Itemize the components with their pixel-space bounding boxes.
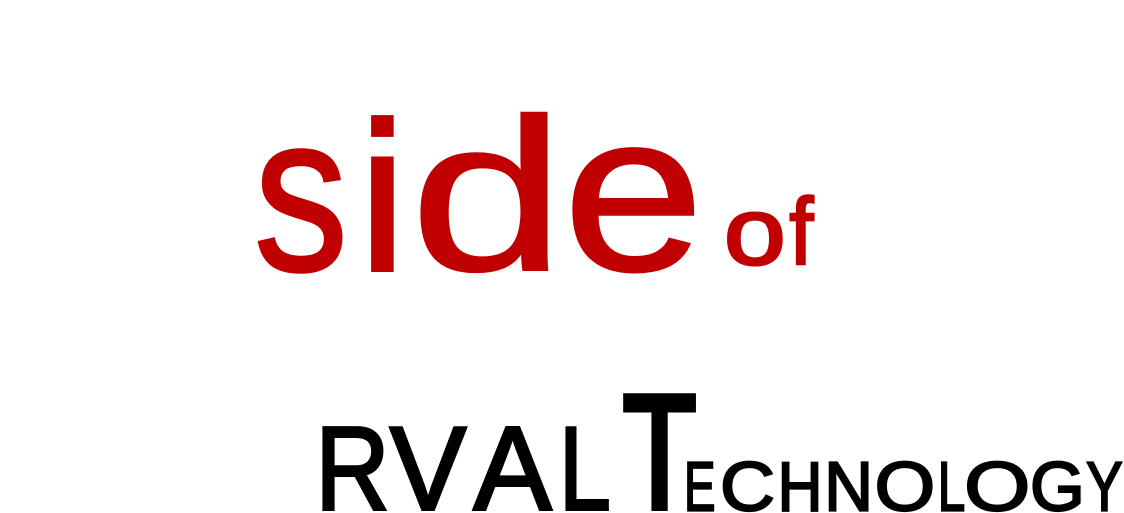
heading word: side: i <box>359 79 406 315</box>
heading word: of: f <box>789 179 814 285</box>
company name: ECHNOLOGY <box>684 448 1123 513</box>
heading word: side: s <box>254 68 348 318</box>
heading word: of: o <box>724 179 786 285</box>
heading word: side: d <box>410 74 565 316</box>
company name: RVAL <box>315 402 611 513</box>
heading word: of <box>724 179 814 285</box>
heading word: side <box>254 65 704 318</box>
heading word: side: e <box>563 65 704 318</box>
